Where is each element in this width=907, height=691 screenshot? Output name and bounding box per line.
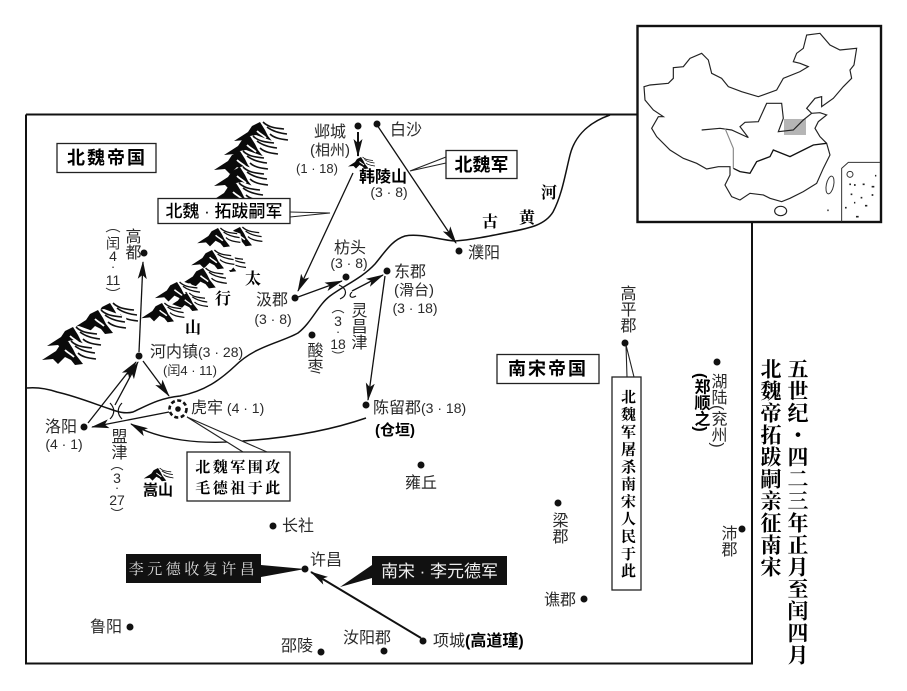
vertical place labels: 4 xyxy=(109,248,117,264)
place labels: 雍丘 xyxy=(405,474,437,492)
vertical place labels: 3 xyxy=(334,313,342,329)
range label: Taihang: 山 xyxy=(185,319,201,337)
place labels: (1 · 18) xyxy=(296,161,338,176)
place labels: 汲郡 xyxy=(256,291,288,309)
vertical place labels: 11 xyxy=(106,272,120,288)
river crossing marks xyxy=(110,285,356,419)
place labels: (3 · 8) xyxy=(330,255,368,271)
range label: Taihang: 太 xyxy=(245,270,261,288)
callout: siege of Mao Dezu xyxy=(187,417,290,501)
main map frame xyxy=(26,114,752,664)
place labels: 韩陵山 xyxy=(359,167,407,186)
black callout: Li Yuande recovers Xuchang xyxy=(126,554,305,583)
black callout: Southern Song Li Yuande army xyxy=(340,556,507,587)
place labels: (3 · 8) xyxy=(370,184,408,200)
vertical place labels: 3 xyxy=(113,470,121,486)
place labels: 嵩山 xyxy=(143,482,173,499)
place labels: 东郡 xyxy=(394,263,426,281)
range label: Taihang: 行 xyxy=(215,290,231,308)
river label: ancient Yellow River: 古 xyxy=(482,212,498,231)
place labels: (仓垣) xyxy=(375,421,415,439)
vertical place labels: 盟津 xyxy=(108,428,128,460)
place labels: 枋头 xyxy=(334,239,366,257)
black callout: Southern Song Li Yuande army: 南宋 · 李元德军 xyxy=(381,562,498,581)
arrows: campaign routes xyxy=(88,125,456,638)
place labels: 长社 xyxy=(282,517,314,535)
place labels: (相州) xyxy=(310,142,350,159)
title: vertical two-column heading: 北魏帝拓跋嗣亲征南宋 xyxy=(758,358,782,578)
river label: ancient Yellow River xyxy=(482,184,557,231)
vertical place labels: 酸枣 xyxy=(304,342,324,374)
settlement dots xyxy=(80,120,746,656)
vertical place labels: 高平郡 xyxy=(618,285,636,333)
vertical place labels: 梁郡 xyxy=(550,512,568,544)
vertical place labels: 高都 xyxy=(122,228,142,260)
heading box: Northern Wei empire: 北魏帝国 xyxy=(67,147,147,168)
heading box: Northern Wei empire xyxy=(57,144,156,172)
callout: siege of Mao Dezu: 北魏军围攻 xyxy=(195,459,283,476)
inset locator map of China xyxy=(638,26,881,222)
vertical place labels: 闰 xyxy=(105,236,121,251)
vertical place labels: 27 xyxy=(109,492,125,508)
place labels: (3 · 18) xyxy=(392,300,438,316)
icon: Hanling mountain xyxy=(347,156,376,170)
place labels: (闰4 · 11) xyxy=(163,363,217,378)
callout: Northern Wei Tuoba Si army: 北魏 · 拓跋嗣军 xyxy=(165,202,283,221)
icon: Songshan mountain xyxy=(143,467,174,483)
place labels: 陈留郡(3 · 18) xyxy=(373,399,466,417)
callout: massacre of Song people: 北魏军屠杀南宋人民于此 xyxy=(619,389,636,580)
callout: massacre of Song people xyxy=(612,345,641,590)
place labels: (滑台) xyxy=(394,282,434,299)
place labels: 濮阳 xyxy=(468,244,500,262)
river label: ancient Yellow River: 河 xyxy=(541,184,557,202)
place labels xyxy=(45,121,576,655)
vertical place labels: (郑顺之) xyxy=(692,373,710,432)
place labels: 汝阳郡 xyxy=(343,629,391,647)
vertical place labels: 沛郡 xyxy=(718,525,738,557)
place labels: (3 · 8) xyxy=(254,311,292,327)
callout: siege of Mao Dezu: 毛德祖于此 xyxy=(195,479,283,497)
black callout: Li Yuande recovers Xuchang: 李元德收复许昌 xyxy=(129,560,258,578)
callout: Northern Wei army xyxy=(410,150,517,178)
heading box: Southern Song empire xyxy=(497,354,599,384)
place labels: 邺城 xyxy=(314,123,346,141)
place labels: 许昌 xyxy=(310,551,342,569)
vertical place labels: 灵昌津 xyxy=(348,302,368,350)
place labels: 虎牢 (4 · 1) xyxy=(191,399,264,417)
Yellow River and tributary xyxy=(27,115,610,441)
place labels: 谯郡 xyxy=(544,591,576,609)
title: vertical two-column heading xyxy=(758,358,809,666)
place labels: 邵陵 xyxy=(281,637,313,655)
vertical place labels: · xyxy=(115,480,119,495)
place labels: 河内镇(3 · 28) xyxy=(150,343,243,361)
vertical place labels: 湖陆(兖州) xyxy=(708,373,728,448)
title: vertical two-column heading: 五世纪・四二三年正月至闰四月 xyxy=(785,358,809,666)
callout: Northern Wei army: 北魏军 xyxy=(454,155,508,175)
vertical place labels: 18 xyxy=(330,336,346,352)
icon: besieged Hulao xyxy=(170,400,186,418)
river label: ancient Yellow River: 黄 xyxy=(519,208,537,227)
range label: Taihang xyxy=(185,270,261,337)
place labels: 项城(高道瑾) xyxy=(433,631,524,650)
place labels: 洛阳 xyxy=(45,418,77,436)
place labels: 白沙 xyxy=(390,121,422,139)
place labels: 鲁阳 xyxy=(90,618,122,636)
callout: Northern Wei Tuoba Si army xyxy=(158,198,330,224)
vertical place labels: · xyxy=(336,324,340,339)
heading box: Southern Song empire: 南宋帝国 xyxy=(508,358,588,379)
vertical place labels: · xyxy=(111,259,115,274)
mountains: Taihang range xyxy=(40,121,290,368)
place labels: (4 · 1) xyxy=(45,436,83,452)
vertical place labels xyxy=(105,228,738,557)
